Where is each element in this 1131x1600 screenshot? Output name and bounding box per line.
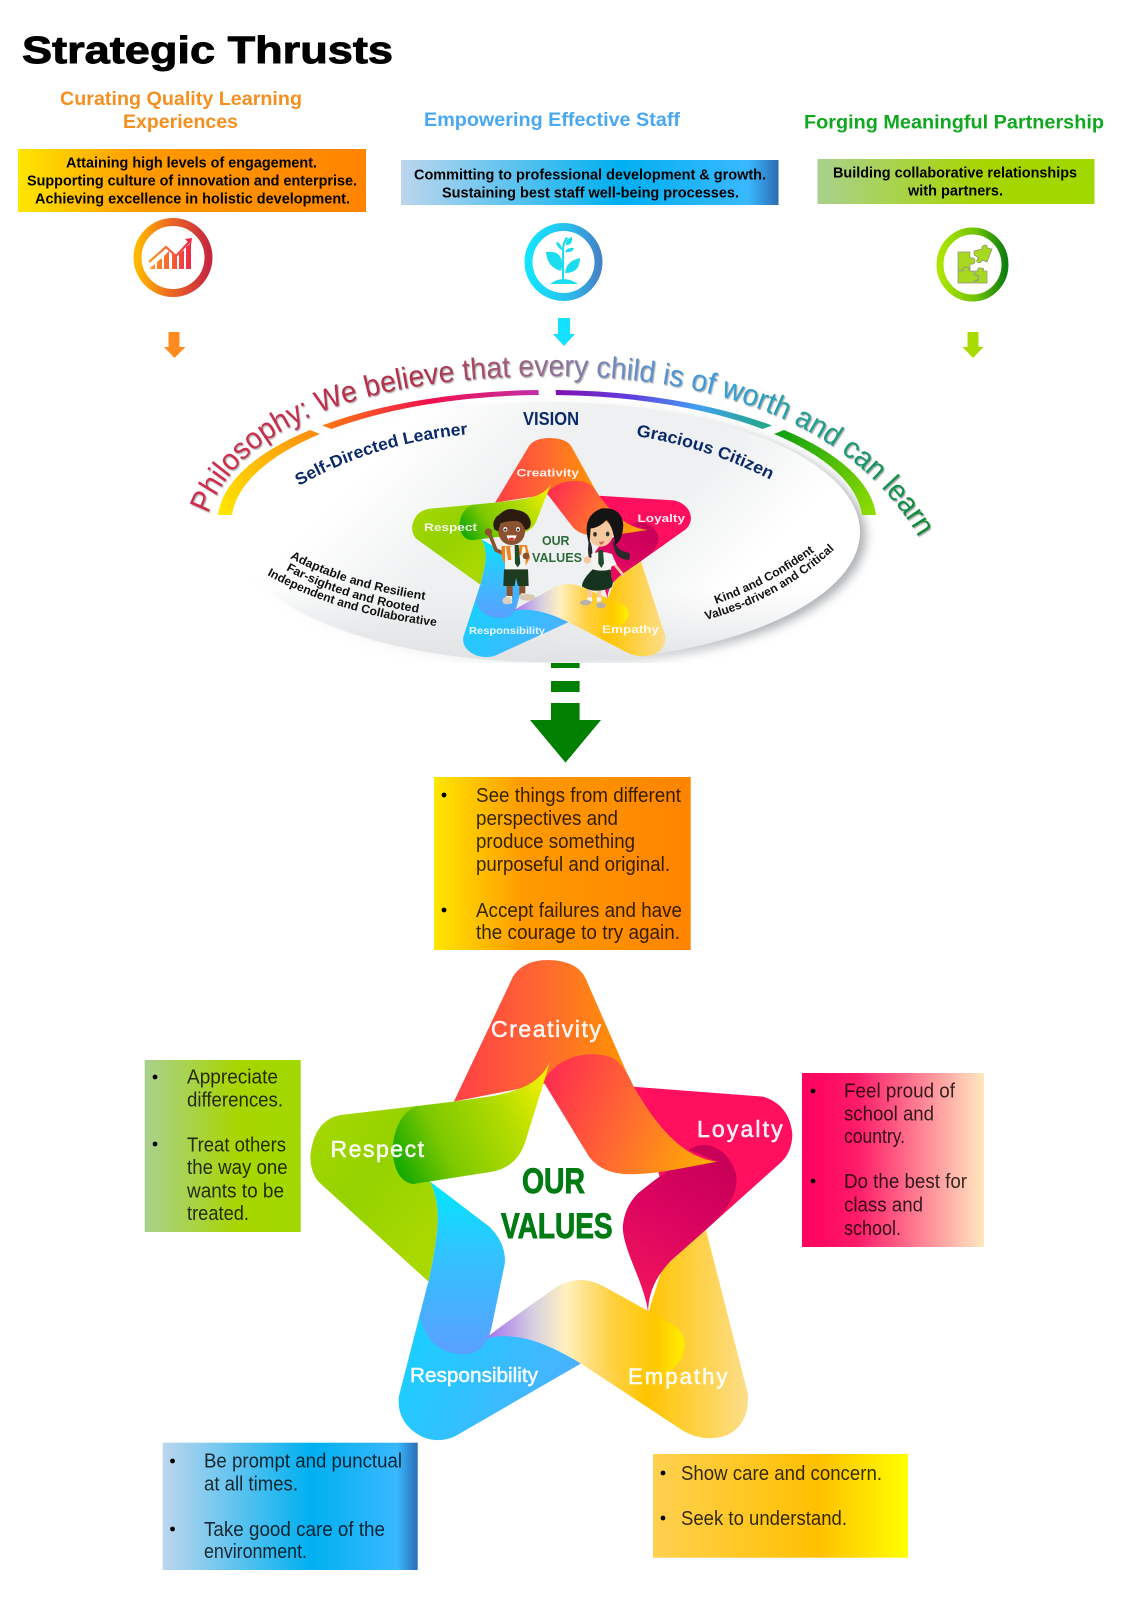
panel: curating quality learning experiences bbox=[18, 89, 366, 358]
panel: responsibility description: Be prompt and punctual bbox=[204, 1451, 402, 1473]
panel: creativity description: See things from different bbox=[476, 785, 681, 807]
big star labels: Loyalty bbox=[697, 1116, 783, 1142]
panel: responsibility description: at all times. bbox=[204, 1474, 298, 1496]
panel: responsibility description bbox=[163, 1443, 418, 1570]
panel: empowering effective staff bbox=[401, 110, 778, 346]
big star labels: Responsibility bbox=[410, 1365, 538, 1387]
text box: empowering description: Sustaining best staff well-being processes. bbox=[442, 184, 739, 201]
panel: loyalty description bbox=[802, 1073, 984, 1247]
big values star bbox=[310, 960, 792, 1440]
citizen attributes: Kind and Confident bbox=[714, 546, 814, 604]
our values label: OUR bbox=[522, 1162, 585, 1201]
icon: seedling bbox=[528, 227, 598, 297]
arrow: lime down bbox=[962, 332, 984, 358]
our values label: VALUES bbox=[501, 1207, 613, 1246]
big star labels: Empathy bbox=[628, 1364, 728, 1389]
panel: forging meaningful partnership bbox=[804, 112, 1104, 358]
panel: loyalty description: school and bbox=[844, 1104, 934, 1126]
panel: creativity description: produce something bbox=[476, 831, 635, 853]
small star labels: Empathy bbox=[602, 624, 660, 636]
rainbow arc bbox=[218, 390, 876, 515]
small star labels: Responsibility bbox=[469, 626, 545, 637]
panel: creativity description: the courage to try again. bbox=[476, 922, 680, 944]
panel: respect description: the way one bbox=[187, 1157, 288, 1179]
icon: puzzle bbox=[940, 231, 1005, 298]
small star labels bbox=[424, 468, 686, 637]
text box: curating description bbox=[18, 149, 366, 212]
big star labels: Creativity bbox=[491, 1016, 602, 1042]
panel: responsibility description: environment. bbox=[204, 1541, 307, 1563]
panel: respect description: Appreciate bbox=[187, 1066, 278, 1088]
small our values label: VALUES bbox=[532, 550, 582, 565]
learner attributes: Adaptable and Resilient bbox=[290, 552, 426, 600]
heading: forging: Forging Meaningful Partnership bbox=[804, 112, 1104, 133]
panel: loyalty description: Do the best for bbox=[844, 1171, 967, 1193]
panel: loyalty description: school. bbox=[844, 1218, 901, 1240]
ellipse backdrop bbox=[234, 402, 866, 666]
panel: creativity description: perspectives and bbox=[476, 808, 618, 830]
panel: creativity description: purposeful and original. bbox=[476, 854, 670, 876]
panel: respect description: differences. bbox=[187, 1090, 283, 1112]
small star labels: Loyalty bbox=[638, 513, 686, 525]
panel: responsibility description: Take good care of the bbox=[204, 1519, 385, 1541]
self-directed learner: Self-Directed Learner bbox=[295, 425, 467, 484]
panel: creativity description bbox=[434, 777, 691, 950]
citizen attributes: Values-driven and Critical bbox=[704, 544, 834, 620]
text box: empowering description: Committing to professional development & growth. bbox=[414, 166, 766, 183]
panel: creativity description: Accept failures and have bbox=[476, 900, 682, 922]
gracious citizen: Gracious Citizen bbox=[638, 425, 772, 480]
learner attributes: Far-sighted and Rooted bbox=[286, 563, 420, 613]
panel: respect description: treated. bbox=[187, 1203, 249, 1225]
arrow: orange down bbox=[164, 332, 186, 358]
boy figure bbox=[485, 509, 535, 604]
title: Strategic Thrusts bbox=[22, 30, 393, 72]
big star labels bbox=[330, 1016, 783, 1389]
learner attributes: Independent and Collaborative bbox=[268, 568, 436, 626]
text box: forging description bbox=[818, 159, 1094, 204]
vision label: VISION bbox=[523, 409, 579, 429]
philosophy statement: Philosophy: We believe that every child is of worth and can learn bbox=[190, 356, 932, 538]
text box: forging description: with partners. bbox=[907, 183, 1003, 200]
small values star bbox=[412, 438, 691, 657]
heading: curating: Curating Quality Learning bbox=[60, 89, 302, 110]
panel: empathy description bbox=[653, 1454, 908, 1558]
panel: loyalty description: Feel proud of bbox=[844, 1081, 955, 1103]
panel: empathy description: Seek to understand. bbox=[681, 1508, 847, 1530]
icon: growth chart bbox=[138, 222, 208, 293]
text box: curating description: Attaining high levels of engagement. bbox=[66, 154, 317, 172]
panel: respect description bbox=[145, 1060, 301, 1232]
panel: loyalty description: class and bbox=[844, 1195, 923, 1217]
panel: respect description: Treat others bbox=[187, 1135, 286, 1157]
arrow: cyan down bbox=[553, 318, 575, 346]
heading: curating bbox=[60, 89, 302, 133]
text box: empowering description bbox=[401, 160, 778, 205]
heading: curating: Experiences bbox=[123, 112, 238, 133]
our values label bbox=[501, 1162, 613, 1246]
text box: forging description: Building collaborative relationships bbox=[833, 165, 1077, 182]
small star labels: Creativity bbox=[516, 468, 580, 480]
small star labels: Respect bbox=[424, 522, 477, 534]
heading: empowering: Empowering Effective Staff bbox=[424, 110, 681, 131]
big star labels: Respect bbox=[330, 1136, 425, 1162]
panel: loyalty description: country. bbox=[844, 1126, 905, 1148]
small our values label: OUR bbox=[542, 533, 570, 548]
small our values label bbox=[532, 533, 582, 565]
girl figure bbox=[580, 508, 630, 608]
arrow: green dashed down bbox=[530, 663, 601, 763]
panel: philosophy and vision ellipse bbox=[190, 356, 932, 663]
text box: curating description: Achieving excellence in holistic development. bbox=[35, 190, 350, 207]
text box: curating description: Supporting culture of innovation and enterprise. bbox=[27, 172, 357, 189]
panel: empathy description: Show care and concern. bbox=[681, 1463, 882, 1485]
panel: respect description: wants to be bbox=[186, 1181, 284, 1203]
